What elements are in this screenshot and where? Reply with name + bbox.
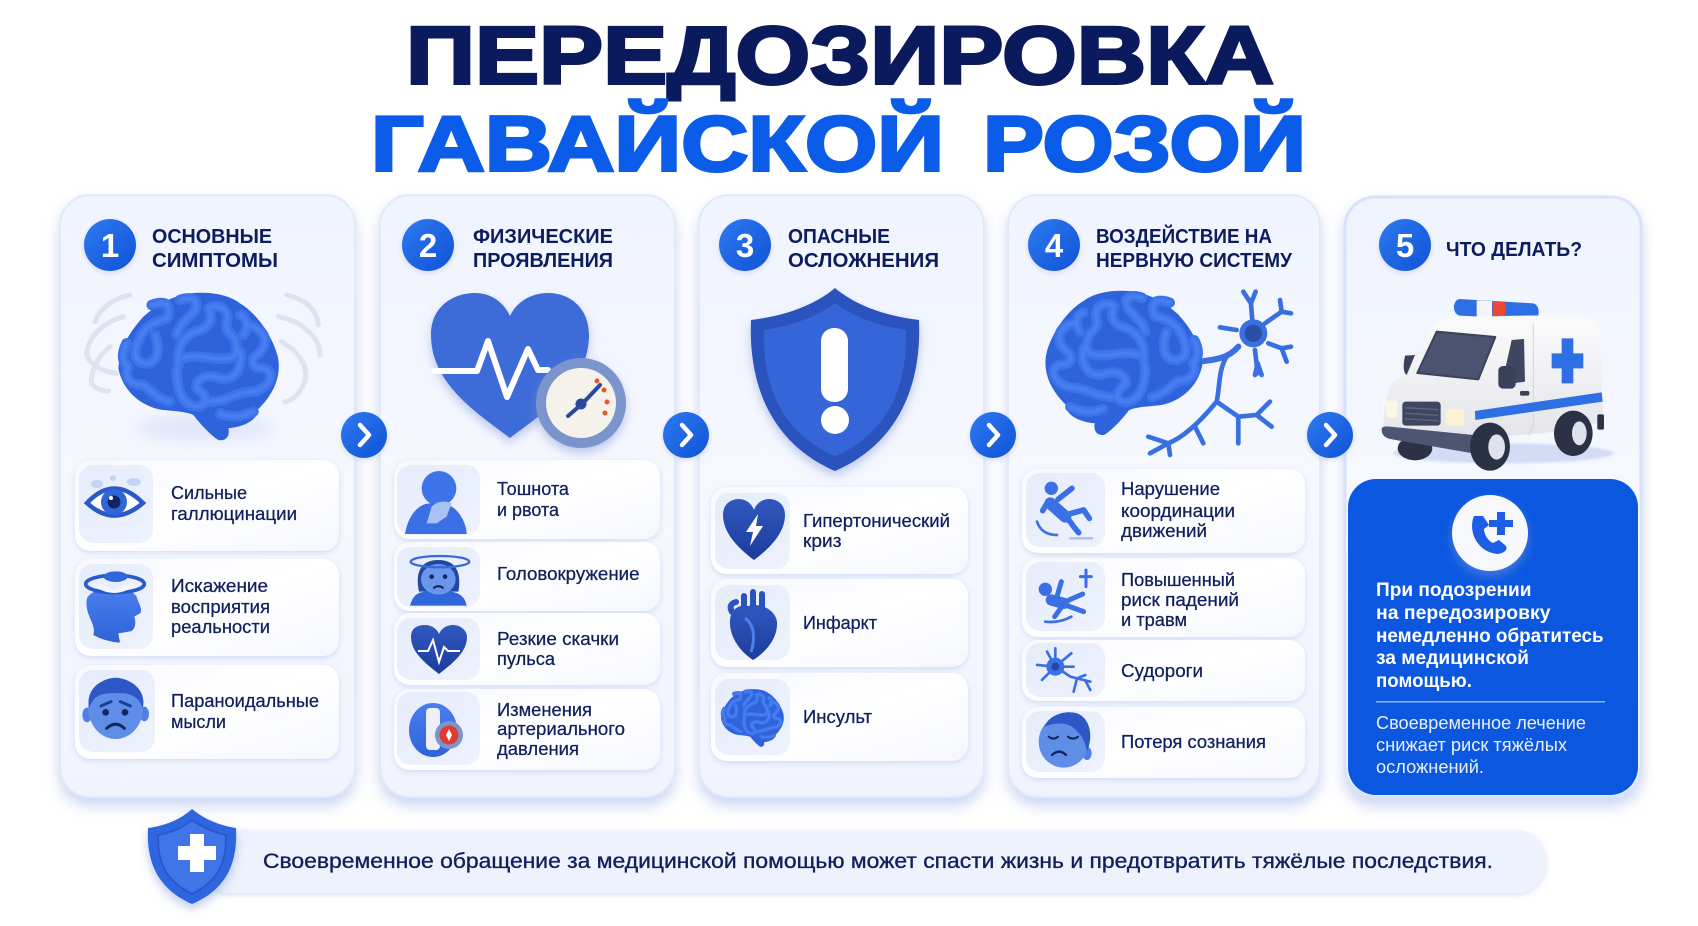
callout: blue panel: немедленно обратитесь — [1376, 625, 1604, 647]
heading 2: ФИЗИЧЕСКИЕ — [473, 226, 613, 248]
windshield — [1417, 332, 1495, 379]
wheels — [1470, 411, 1593, 471]
number badge 1: 1 — [101, 227, 119, 264]
row: пульс: пульса — [497, 649, 556, 669]
row: паранойя — [75, 665, 339, 759]
panel: нервная система — [1008, 195, 1320, 797]
row: тошнота: Тошнота — [497, 479, 570, 499]
row: галлюцинации — [75, 460, 339, 551]
footer banner — [148, 809, 1546, 904]
number badge 5 — [1379, 219, 1431, 271]
row: тошнота: и рвота — [497, 500, 560, 520]
number badge 5: 5 — [1396, 227, 1414, 264]
icon: falling person with bolt — [1039, 570, 1091, 622]
number badge 1 — [84, 219, 136, 271]
title line 2: ГАВАЙСКОЙ — [371, 100, 944, 188]
heading 3: ОСЛОЖНЕНИЯ — [788, 250, 939, 272]
heading 2: ПРОЯВЛЕНИЯ — [473, 250, 613, 272]
row: искажение: реальности — [171, 617, 270, 637]
row: гипертонический криз: криз — [803, 531, 842, 551]
row: пульс: Резкие скачки — [497, 629, 619, 649]
icon: small brain — [721, 689, 784, 747]
row: давление — [394, 689, 660, 770]
row: потеря сознания — [1022, 707, 1305, 778]
row: давление: давления — [497, 739, 579, 759]
row: искажение — [75, 559, 339, 656]
icon: neuron — [1037, 648, 1090, 692]
title — [371, 10, 1306, 188]
icon: shield with cross — [148, 809, 236, 904]
icon: head with swirl — [86, 571, 144, 643]
row: риск падений: Повышенный — [1121, 570, 1235, 590]
row: гипертонический криз: Гипертонический — [803, 511, 950, 531]
heading 4: НЕРВНУЮ СИСТЕМУ — [1096, 250, 1293, 272]
heading 1: ОСНОВНЫЕ — [152, 226, 272, 248]
footer banner: Своевременное обращение за медицинской помощью может спасти жизнь и предотвратить тяжёлые последствия. — [263, 850, 1493, 873]
callout: blue panel: При подозрении — [1376, 579, 1532, 601]
row: нарушение координации: Нарушение — [1121, 479, 1220, 499]
row: инфаркт: Инфаркт — [803, 613, 877, 633]
arrow 4 — [1307, 412, 1353, 458]
icon: heart with bolt — [723, 499, 785, 560]
number badge 2: 2 — [419, 227, 437, 264]
row: галлюцинации: галлюцинации — [171, 504, 297, 524]
row: гипертонический криз — [711, 487, 968, 574]
callout: blue panel — [1348, 479, 1638, 795]
row: головокружение: Головокружение — [497, 564, 640, 584]
heading 4: ВОЗДЕЙСТВИЕ НА — [1096, 224, 1272, 248]
callout: blue panel: на передозировку — [1376, 602, 1551, 624]
icon: falling person — [1037, 482, 1092, 538]
row: паранойя: Параноидальные — [171, 691, 319, 711]
row: тошнота — [394, 460, 660, 539]
icon: worried face — [82, 678, 149, 739]
callout: blue panel: за медицинской — [1376, 647, 1529, 669]
title line 2: РОЗОЙ — [983, 100, 1306, 188]
row: потеря сознания: Потеря сознания — [1121, 732, 1266, 752]
row: давление: артериального — [497, 719, 625, 739]
arrow 3 — [970, 412, 1016, 458]
row: инсульт — [711, 673, 968, 761]
icon: blood pressure gauge — [409, 703, 463, 757]
panel: что делать — [1345, 197, 1641, 797]
row: давление: Изменения — [497, 700, 592, 720]
row: нарушение координации: движений — [1121, 521, 1207, 541]
heading 3: ОПАСНЫЕ — [788, 226, 890, 248]
row: риск падений — [1022, 558, 1305, 637]
number badge 4: 4 — [1045, 227, 1064, 264]
icon: dizzy face — [410, 556, 469, 606]
number badge 2 — [402, 219, 454, 271]
row: инфаркт — [711, 579, 968, 667]
row: паранойя: мысли — [171, 712, 226, 732]
cross — [1552, 338, 1583, 383]
row: риск падений: и травм — [1121, 610, 1187, 630]
number badge 4 — [1028, 219, 1080, 271]
number badge 3: 3 — [736, 227, 754, 264]
row: головокружение — [394, 542, 660, 611]
row: нарушение координации — [1022, 469, 1305, 553]
callout: blue panel: помощью. — [1376, 670, 1472, 692]
icon: shield with exclamation — [751, 288, 919, 471]
row: судороги — [1022, 640, 1305, 701]
icon: ambulance — [1382, 299, 1613, 471]
icon: brain with swirl — [87, 293, 320, 440]
row: искажение: восприятия — [171, 597, 270, 617]
arrow 2 — [663, 412, 709, 458]
arrow 1 — [341, 412, 387, 458]
panel: физические проявления — [380, 195, 675, 797]
icon: anatomical heart — [730, 592, 777, 660]
icon: nauseous person — [405, 471, 467, 534]
title line 2 — [371, 100, 1306, 188]
icon: heart with gauge — [431, 293, 626, 448]
gauge — [536, 358, 626, 448]
heading 5: ЧТО ДЕЛАТЬ? — [1446, 239, 1582, 261]
icon: phone — [1452, 495, 1528, 571]
panel: основные симптомы — [60, 195, 355, 797]
heading 1: СИМПТОМЫ — [152, 250, 278, 272]
number badge 3 — [719, 219, 771, 271]
row: галлюцинации: Сильные — [171, 483, 247, 503]
light bar — [1454, 299, 1539, 319]
row: искажение: Искажение — [171, 576, 268, 596]
row: судороги: Судороги — [1121, 661, 1203, 681]
icon: brain with neuron — [1045, 291, 1291, 455]
callout: blue panel: снижает риск тяжёлых — [1376, 735, 1567, 755]
callout: blue panel: осложнений. — [1376, 757, 1484, 777]
panel: опасные осложнения — [699, 195, 984, 797]
row: пульс — [394, 613, 660, 685]
row: нарушение координации: координации — [1121, 501, 1235, 521]
title line 1: ПЕРЕДОЗИРОВКА — [406, 10, 1274, 102]
row: инсульт: Инсульт — [803, 707, 872, 727]
icon: eye — [87, 475, 143, 516]
callout: blue panel: Своевременное лечение — [1376, 713, 1586, 733]
row: риск падений: риск падений — [1121, 590, 1239, 610]
icon: unconscious face — [1039, 712, 1092, 768]
icon: heart ecg — [411, 625, 467, 674]
